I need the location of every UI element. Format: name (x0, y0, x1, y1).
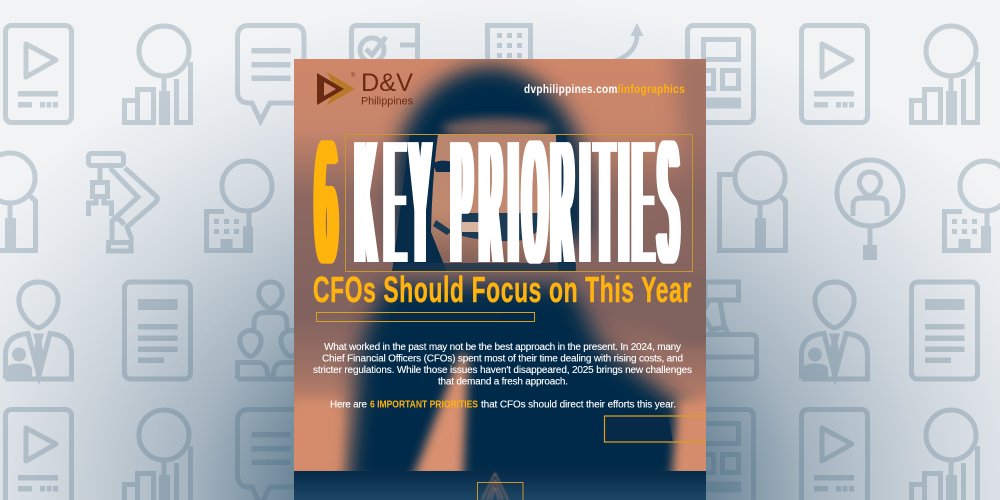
logo wordmark: D&V (361, 69, 413, 97)
priorities sentence: that CFOs should direct their efforts this year. (481, 400, 676, 410)
priorities sentence: 6 IMPORTANT PRIORITIES (370, 400, 478, 410)
blurred duotone photo backdrop (294, 50, 720, 490)
intro paragraph: stricter regulations. While those issues haven't disappeared, 2025 brings new challenges (313, 365, 692, 376)
subtitle: CFOs Should Focus on This Year (313, 269, 692, 310)
sharp photo inside title box (392, 134, 576, 272)
intro paragraph: What worked in the past may not be the best approach in the present. In 2024, many (324, 342, 681, 353)
title number 6: 6 (316, 101, 336, 303)
title: key priorities: KEY PRIORITIES (356, 102, 678, 303)
bottom triangle motif (478, 473, 523, 500)
intro paragraph (313, 342, 692, 388)
decorative bar frame (316, 312, 534, 322)
logo wordmark: ® (351, 72, 356, 79)
intro paragraph: that demand a fresh approach. (438, 376, 568, 388)
website url: dvphilippines.com/infographics (524, 82, 685, 96)
logo wordmark: Philippines (361, 96, 413, 108)
intro paragraph: Chief Financial Officers (CFOs) spent most of their time dealing with rising costs, and (322, 354, 683, 364)
logo (317, 69, 413, 108)
title box frame (346, 134, 692, 272)
priorities sentence (330, 400, 676, 410)
priorities sentence: Here are (330, 400, 367, 410)
logo wordmark (351, 69, 413, 108)
icon: logo arrows (317, 72, 355, 105)
bottom navy strip (294, 471, 706, 500)
panel: poster (294, 50, 720, 500)
decorative right frame (604, 416, 706, 442)
